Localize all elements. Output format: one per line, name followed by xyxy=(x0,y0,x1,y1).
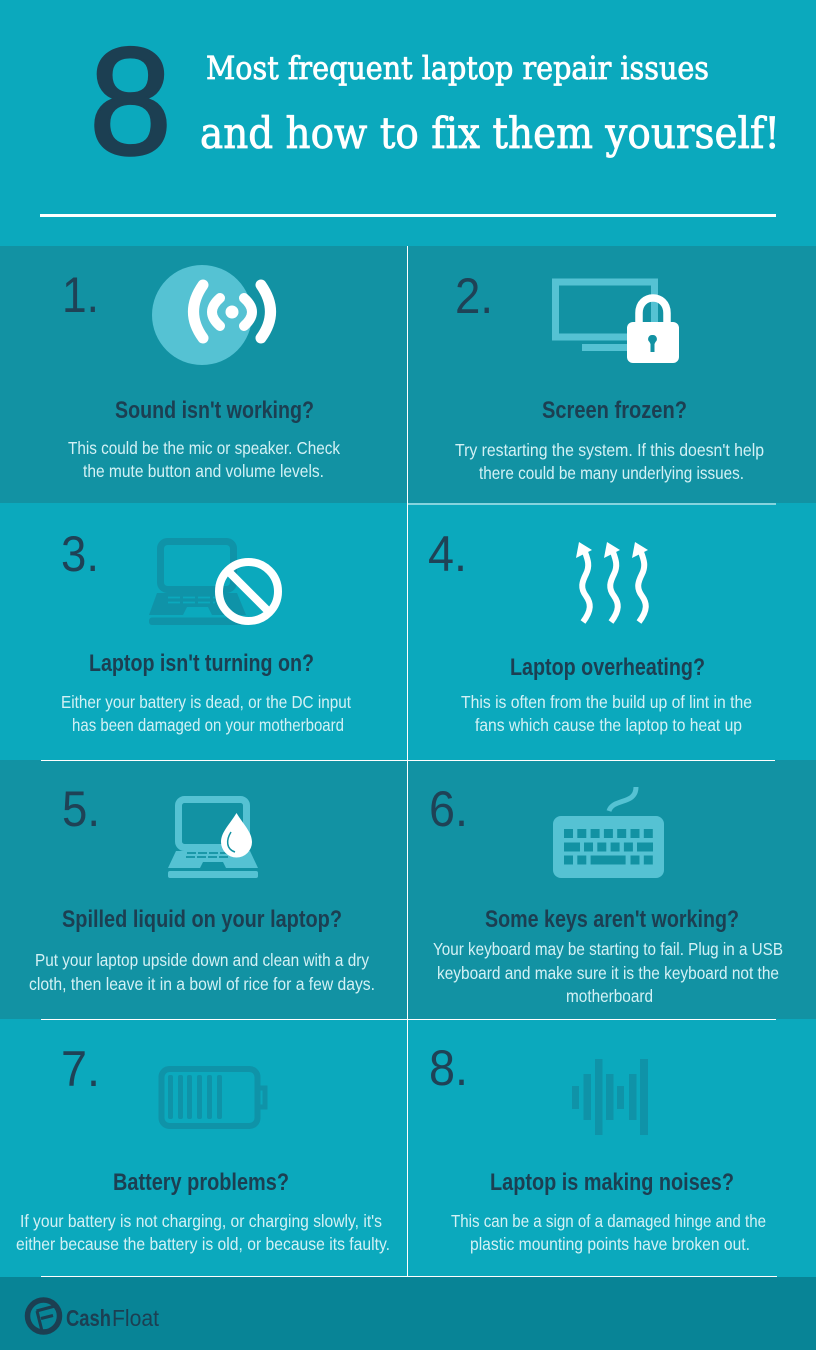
heading: Some keys aren't working? xyxy=(485,906,739,933)
number 5: 5. xyxy=(62,781,100,837)
title line 1: Most frequent laptop repair issues xyxy=(206,49,709,87)
body text xyxy=(16,1211,390,1254)
number 8: 8. xyxy=(429,1040,468,1096)
number 6: 6. xyxy=(429,781,468,837)
heading: Battery problems? xyxy=(113,1169,289,1196)
body text: This can be a sign of a damaged hinge and the xyxy=(451,1211,766,1231)
title xyxy=(89,16,780,187)
logo wordmark: Float xyxy=(112,1305,160,1331)
panel: overheating xyxy=(428,526,752,735)
body text xyxy=(433,939,783,1006)
body text xyxy=(461,692,752,735)
number 2: 2. xyxy=(455,268,493,324)
panel: spilled liquid xyxy=(29,781,375,994)
body text xyxy=(455,440,764,483)
body text: keyboard and make sure it is the keyboard not the xyxy=(437,963,779,983)
body text xyxy=(451,1211,766,1254)
icon: battery xyxy=(162,1069,265,1126)
panel: battery xyxy=(16,1041,390,1254)
body text: motherboard xyxy=(566,986,653,1006)
icon: CashFloat logo xyxy=(28,1300,60,1332)
icon: keyboard xyxy=(553,787,664,878)
icon: laptop with water drop xyxy=(168,800,258,878)
body text: Try restarting the system. If this doesn't help xyxy=(455,440,764,460)
number 3: 3. xyxy=(61,526,99,582)
panel: keys not working xyxy=(429,781,783,1006)
body text xyxy=(29,950,375,994)
body text: This could be the mic or speaker. Check xyxy=(68,438,340,458)
body text: has been damaged on your motherboard xyxy=(72,715,344,735)
body text: the mute button and volume levels. xyxy=(83,461,324,481)
body text: If your battery is not charging, or charging slowly, it's xyxy=(20,1211,382,1231)
heading: Laptop isn't turning on? xyxy=(89,650,314,677)
icon: sound wave bars xyxy=(572,1059,648,1135)
heading: Laptop is making noises? xyxy=(490,1169,734,1196)
body text: either because the battery is old, or because its faulty. xyxy=(16,1234,390,1254)
number 7: 7. xyxy=(61,1041,100,1097)
logo wordmark: Cash xyxy=(66,1305,111,1331)
heading: Sound isn't working? xyxy=(115,397,314,424)
heading: Spilled liquid on your laptop? xyxy=(62,906,342,933)
icon: sound waves xyxy=(152,265,270,365)
body text: Put your laptop upside down and clean with a dry xyxy=(35,950,369,970)
body text: fans which cause the laptop to heat up xyxy=(475,715,742,735)
icon: laptop with prohibition sign xyxy=(149,542,278,625)
body text xyxy=(61,692,351,735)
footer xyxy=(0,1277,816,1350)
panel: screen frozen xyxy=(455,268,764,483)
icon: monitor with padlock xyxy=(556,282,679,363)
number 4: 4. xyxy=(428,526,467,582)
panel: noises xyxy=(429,1040,766,1254)
big number 8: 8 xyxy=(89,16,172,187)
panel: not turning on xyxy=(61,526,351,735)
number 1: 1. xyxy=(62,267,99,323)
panel: sound xyxy=(62,265,340,481)
body text: This is often from the build up of lint in the xyxy=(461,692,752,712)
body text: cloth, then leave it in a bowl of rice for a few days. xyxy=(29,974,375,994)
icon: rising heat arrows xyxy=(576,542,648,622)
body text: Either your battery is dead, or the DC input xyxy=(61,692,351,712)
body text: there could be many underlying issues. xyxy=(479,463,744,483)
body text: plastic mounting points have broken out. xyxy=(470,1234,750,1254)
heading: Screen frozen? xyxy=(542,397,687,424)
body text xyxy=(68,438,340,481)
heading: Laptop overheating? xyxy=(510,654,705,681)
logo wordmark xyxy=(66,1305,160,1331)
